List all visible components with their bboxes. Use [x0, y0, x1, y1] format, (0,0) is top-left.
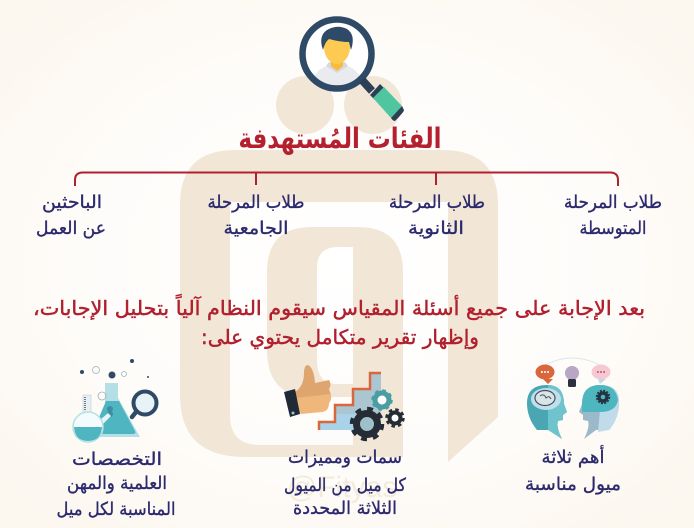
- group label: middle school: [564, 192, 662, 239]
- connector bracket: [75, 172, 618, 186]
- group label: job seekers: عن العمل: [36, 218, 106, 239]
- caption: specialties: [56, 449, 176, 520]
- group label: middle school: المتوسطة: [580, 218, 646, 239]
- group label: job seekers: [36, 192, 106, 239]
- faint handle watermark: @Fityas: [287, 471, 397, 504]
- caption: traits: [284, 447, 406, 519]
- icon: thumbs up with stairs and gears: [284, 365, 404, 440]
- group label: secondary: [389, 192, 485, 239]
- group label: secondary: الثانوية: [408, 218, 464, 239]
- group label: university: [208, 192, 304, 239]
- caption: top three interests: أهم ثلاثة: [542, 445, 604, 468]
- icon: magnifier with person: [302, 20, 404, 121]
- caption: top three interests: ميول مناسبة: [525, 474, 621, 495]
- caption: traits: سمات ومميزات: [288, 447, 402, 468]
- icon: two heads with ideas: [527, 358, 619, 439]
- caption: traits: الثلاثة المحددة: [293, 498, 397, 519]
- group label: university: طلاب المرحلة: [208, 192, 304, 213]
- red description text: بعد الإجابة على جميع أسئلة المقياس سيقوم النظام آلياً بتحليل الإجابات،: [33, 294, 645, 320]
- icon: lab flasks: [73, 359, 156, 442]
- caption: specialties: التخصصات: [72, 449, 162, 470]
- caption: specialties: المناسبة لكل ميل: [56, 499, 176, 520]
- caption: top three interests: [525, 445, 621, 495]
- red description text: وإظهار تقرير متكامل يحتوي على:: [201, 325, 479, 350]
- group label: middle school: طلاب المرحلة: [564, 192, 662, 213]
- background watermark logo: [180, 76, 498, 462]
- group label: job seekers: الباحثين: [42, 192, 102, 213]
- group label: secondary: طلاب المرحلة: [389, 192, 485, 213]
- caption: specialties: العلمية والمهن: [67, 473, 167, 494]
- group label: university: الجامعية: [224, 218, 288, 239]
- title: الفئات المُستهدفة: [238, 122, 442, 155]
- caption: traits: كل ميل من الميول: [284, 475, 406, 496]
- red description text: [33, 294, 645, 350]
